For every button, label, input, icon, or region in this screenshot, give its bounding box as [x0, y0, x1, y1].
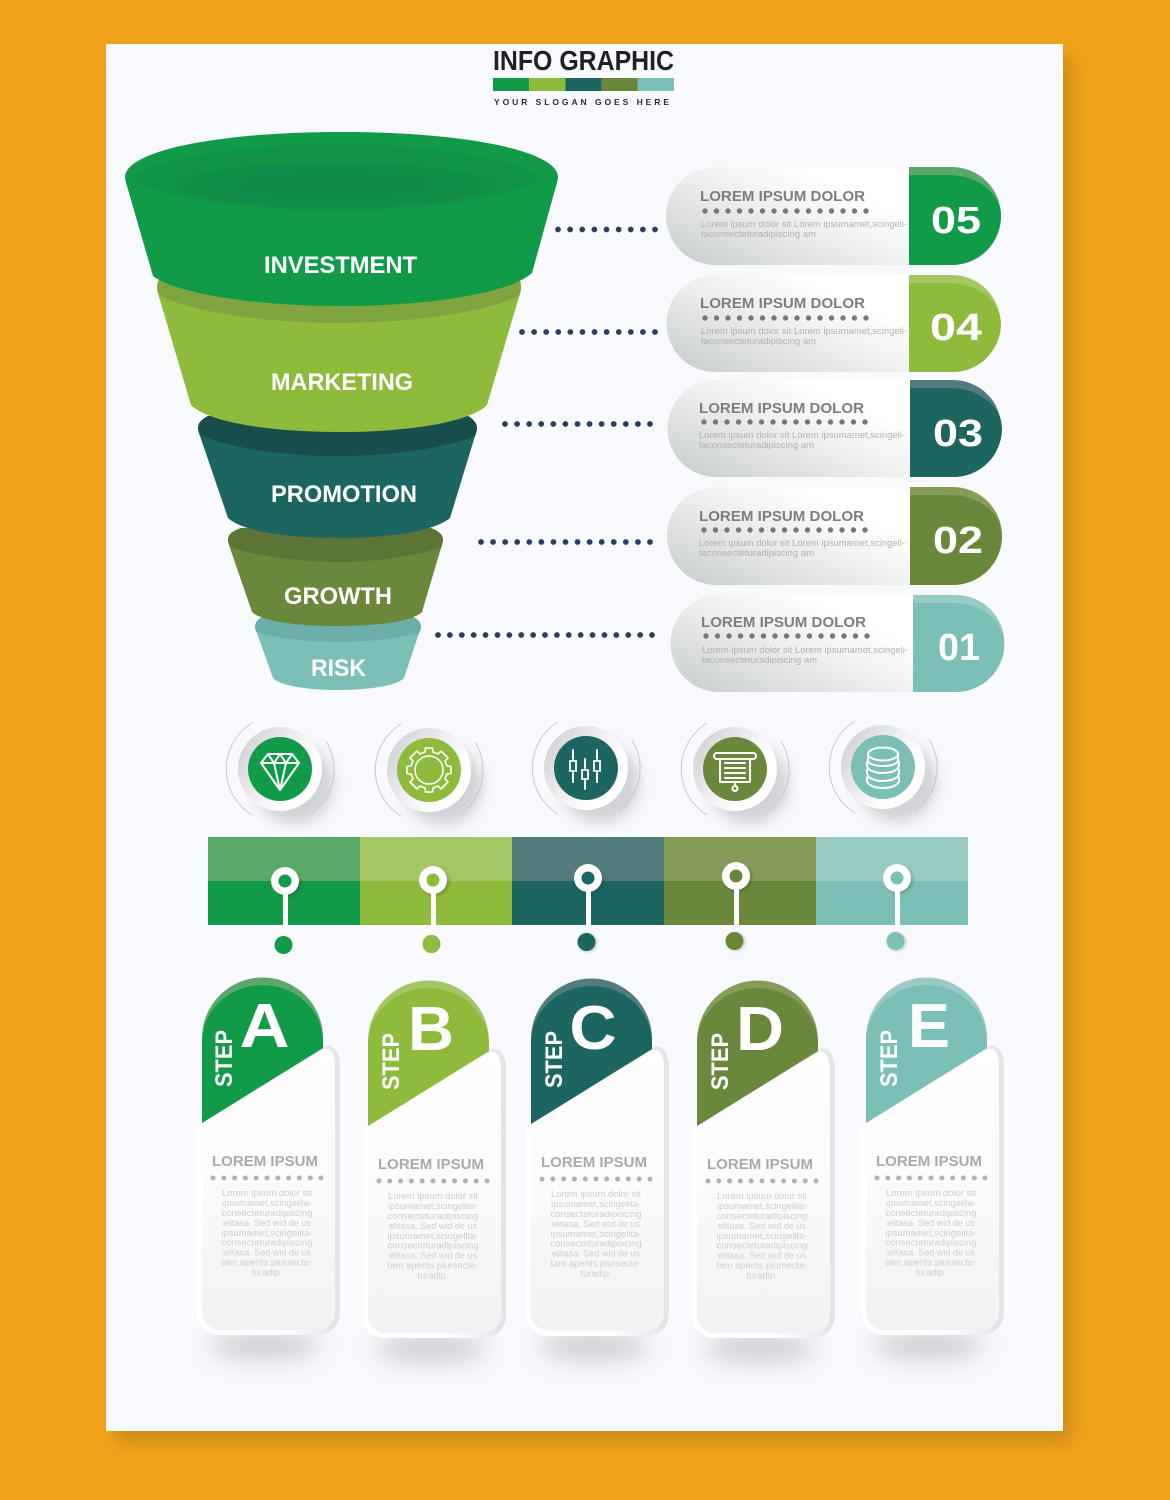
pill 01: LOREM IPSUM DOLOR: [701, 614, 866, 631]
dotted connector: growth: [481, 539, 651, 545]
step card B: turadip.: [418, 1270, 448, 1280]
pill 03: [668, 380, 1002, 477]
step card D: [692, 980, 835, 1363]
step card B: STEP: [378, 1033, 405, 1090]
step card A: ipsumamet,scingelita-: [222, 1228, 312, 1238]
step card E: Lorem ipsum dolor sit: [886, 1188, 977, 1198]
step card C: C: [570, 994, 616, 1063]
step card A: consecteturadipiscing: [222, 1208, 312, 1218]
pill 01: [671, 595, 1004, 692]
step card C: consecteturadipiscing: [550, 1209, 642, 1219]
pill 01: Lorem ipsum dolor sit Lorem ipsumamet,scingeli-: [702, 645, 908, 655]
pill 02: [667, 487, 1002, 585]
pill 02: Lorem ipsum dolor sit Lorem ipsumamet,scingeli-: [699, 538, 905, 548]
pill 04: LOREM IPSUM DOLOR: [700, 295, 865, 312]
step card C: elitasa. Sed wid de us: [552, 1219, 640, 1229]
step card C: LOREM IPSUM: [541, 1154, 647, 1171]
funnel layer: growth: GROWTH: [284, 583, 392, 610]
pill 03: LOREM IPSUM DOLOR: [699, 400, 864, 417]
step card A: [197, 978, 340, 1360]
step card B: Lorem ipsum dolor sit: [388, 1191, 479, 1201]
dotted connector: risk: [438, 632, 653, 638]
step card D: consecteturadipiscing: [716, 1211, 808, 1221]
pin D: [722, 862, 752, 951]
colour band: [208, 837, 968, 925]
dotted connector: promotion: [505, 421, 651, 427]
pill 02: taconsecteturadipiscing am: [699, 548, 814, 558]
icon: diamond badge: [226, 723, 334, 824]
step card E: consecteturadipiscing: [886, 1238, 976, 1248]
step card B: tam apertis plursecte-: [388, 1260, 478, 1270]
funnel layer: marketing: [157, 277, 521, 432]
pill 03: taconsecteturadipiscing am: [699, 440, 814, 450]
icon: database badge: [829, 721, 937, 822]
step card C: elitasa. Sed wid de us: [552, 1248, 640, 1258]
step card B: ipsumamet,scingelita-: [388, 1231, 478, 1241]
slogan: YOUR SLOGAN GOES HERE: [494, 97, 669, 107]
step card C: [526, 978, 669, 1361]
white page panel: [106, 44, 1063, 1431]
step card D: consecteturadipiscing: [716, 1240, 808, 1250]
step card D: turadip.: [746, 1270, 778, 1280]
title block: [493, 45, 674, 107]
step card D: Lorem ipsum dolor sit: [717, 1191, 808, 1201]
pill 05: Lorem ipsum dolor sit Lorem ipsumamet,scingeli-: [701, 219, 907, 229]
pin E: [883, 864, 913, 951]
step card E: ipsumamet,scingelita-: [886, 1228, 976, 1238]
step card E: [861, 978, 1004, 1360]
step card D: ipsumamet,scingelita-: [717, 1201, 807, 1211]
step card D: ipsumamet,scingelita-: [716, 1231, 808, 1241]
step card E: STEP: [876, 1030, 903, 1087]
funnel layer: investment: [125, 132, 558, 306]
step card C: consecteturadipiscing: [550, 1238, 642, 1248]
pill 01: taconsecteturadipiscing am: [702, 655, 817, 665]
step card D: tam apertis plursecte-: [716, 1260, 808, 1270]
step card A: consecteturadipiscing: [222, 1238, 312, 1248]
step card E: LOREM IPSUM: [876, 1153, 982, 1170]
pill 05: 05: [931, 200, 981, 242]
step card A: A: [240, 992, 290, 1061]
funnel layer: risk: [255, 614, 421, 690]
step card B: ipsumamet,scingelita-: [388, 1201, 478, 1211]
pin A: [271, 867, 301, 954]
step card E: turadip.: [916, 1268, 946, 1278]
step card A: STEP: [211, 1030, 238, 1087]
step card A: turadip.: [252, 1268, 282, 1278]
step card B: consecteturadipiscing: [388, 1240, 478, 1250]
title: INFO GRAPHIC: [493, 45, 674, 76]
funnel layer: risk: RISK: [311, 655, 367, 682]
step card A: elitasa. Sed wid de us: [223, 1248, 311, 1258]
step card D: D: [736, 995, 784, 1064]
step card B: [363, 980, 506, 1363]
icon: presentation board badge: [681, 723, 789, 824]
step card B: elitasa. Sed wid de us: [389, 1250, 477, 1260]
step card C: ipsumamet,scingelita-: [551, 1199, 641, 1209]
step card D: STEP: [707, 1033, 734, 1090]
pill 01: 01: [938, 627, 980, 669]
pin B: [419, 866, 449, 953]
step card A: ipsumamet,scingelita-: [222, 1198, 312, 1208]
step card E: tam apertis plursecte-: [886, 1258, 976, 1268]
step card C: tam apertis plursecte-: [550, 1258, 642, 1268]
funnel layer: growth: [228, 528, 443, 626]
step card C: Lorem ipsum dolor sit: [551, 1189, 642, 1199]
pill 04: taconsecteturadipiscing am: [701, 336, 816, 346]
step card D: elitasa. Sed wid de us: [718, 1250, 806, 1260]
funnel layer: promotion: PROMOTION: [271, 481, 417, 508]
pill 05: [666, 167, 1001, 265]
funnel layer: promotion: [198, 416, 477, 538]
step card E: E: [908, 992, 950, 1061]
step card D: elitasa. Sed wid de us: [718, 1221, 806, 1231]
step card E: ipsumamet,scingelita-: [886, 1198, 976, 1208]
pin C: [574, 864, 604, 952]
pill 02: 02: [933, 520, 983, 562]
step card B: LOREM IPSUM: [378, 1156, 484, 1173]
page shadow: [116, 56, 1071, 1442]
step card A: elitasa. Sed wid de us: [223, 1218, 311, 1228]
step card B: elitasa. Sed wid de us: [389, 1221, 477, 1231]
pill 02: LOREM IPSUM DOLOR: [699, 508, 864, 525]
pill 03: 03: [933, 413, 983, 455]
pill 05: taconsecteturadipiscing am: [701, 229, 816, 239]
step card B: consecteturadipiscing: [388, 1211, 478, 1221]
funnel chart: [125, 132, 558, 690]
step card B: B: [408, 995, 454, 1064]
pill 04: Lorem ipsum dolor sit Lorem ipsumamet,scingeli-: [701, 326, 907, 336]
funnel layer: investment: INVESTMENT: [264, 252, 417, 279]
dotted connector: marketing: [522, 329, 656, 335]
pill 04: [667, 275, 1001, 372]
step card A: LOREM IPSUM: [212, 1153, 318, 1170]
step card E: elitasa. Sed wid de us: [887, 1248, 975, 1258]
dotted connector: investment: [558, 227, 656, 232]
step card E: consecteturadipiscing: [886, 1208, 976, 1218]
pill 03: Lorem ipsum dolor sit Lorem ipsumamet,scingeli-: [699, 430, 905, 440]
step card E: elitasa. Sed wid de us: [887, 1218, 975, 1228]
step card A: tam apertis plursecte-: [222, 1258, 312, 1268]
step card C: turadip.: [580, 1268, 612, 1278]
icon: gear badge: [375, 724, 483, 825]
step card C: STEP: [541, 1031, 568, 1088]
icon: candlestick badge: [532, 722, 640, 823]
pill 04: 04: [930, 307, 982, 349]
funnel layer: marketing: MARKETING: [271, 369, 413, 396]
step card C: ipsumamet,scingelita-: [550, 1229, 642, 1239]
pill 05: LOREM IPSUM DOLOR: [700, 188, 865, 205]
step card D: LOREM IPSUM: [707, 1156, 813, 1173]
title colour bar: [493, 78, 674, 91]
step card A: Lorem ipsum dolor sit: [222, 1188, 313, 1198]
